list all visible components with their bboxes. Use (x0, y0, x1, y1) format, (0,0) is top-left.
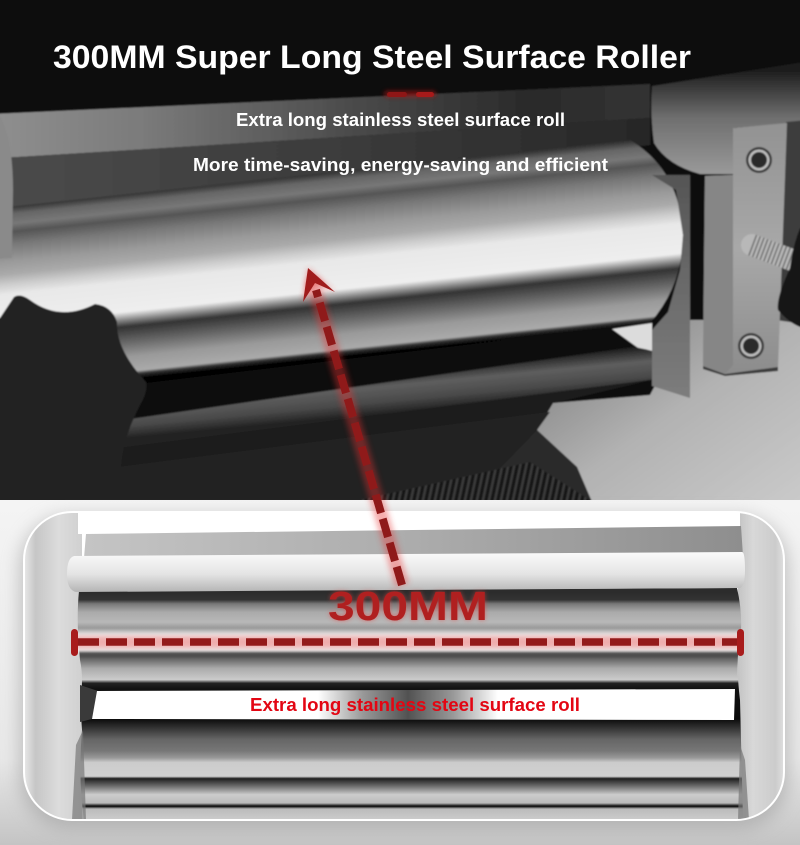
dimension label: 300MM: 300MM (328, 583, 488, 629)
right knob (778, 228, 800, 327)
shelf upper band (0, 84, 650, 160)
light triangle behind roller (612, 323, 652, 358)
subtitle line 1: Extra long stainless steel surface roll (236, 110, 565, 130)
panel: top roller photo (0, 0, 800, 530)
upper right block (651, 58, 800, 174)
dark right background (780, 120, 800, 323)
main steel roller (0, 140, 683, 404)
left housing end (0, 157, 14, 250)
dark gap (690, 172, 704, 318)
icon: socket bolts (738, 147, 772, 359)
panel: lower close-up photo background (0, 500, 800, 845)
dimension label: 300MM: 300MM (328, 583, 488, 629)
subtitle line 2: More time-saving, energy-saving and efficient (193, 155, 608, 175)
threaded rod (752, 245, 792, 260)
conveyor teeth (362, 462, 588, 500)
decorative red dash under title (384, 91, 436, 97)
lower thin roller (124, 346, 654, 447)
caption: Extra long stainless steel surface roll (250, 695, 580, 715)
speckled edge (72, 730, 86, 820)
panel: white label band with caption (92, 689, 735, 720)
panel: rounded roller close-up (20, 498, 788, 828)
lower dark body (354, 382, 646, 424)
right mounting plate (703, 123, 787, 376)
icon: left star knob (0, 294, 147, 448)
dimension line: 300MM width (71, 629, 744, 656)
title: 300MM Super Long Steel Surface Roller (53, 39, 691, 75)
roller bracket (652, 175, 690, 398)
arrow: diagonal dashed pointer (303, 268, 402, 585)
shelf lower band (0, 118, 650, 215)
floor at right (536, 318, 800, 500)
upper white bar (67, 552, 745, 592)
